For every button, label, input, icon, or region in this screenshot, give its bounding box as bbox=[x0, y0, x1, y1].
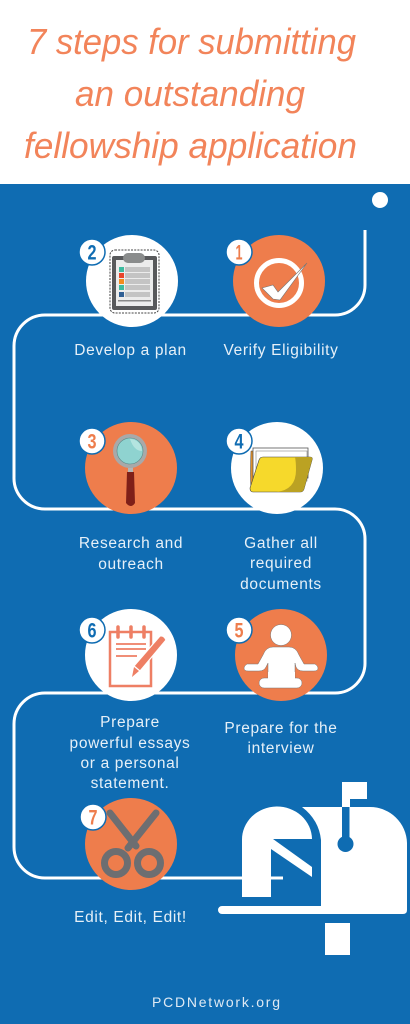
label: essays: statement. bbox=[91, 775, 169, 792]
badge 3: 3 bbox=[88, 430, 96, 454]
title: fellowship application bbox=[24, 125, 357, 166]
badge 6: 6 bbox=[88, 620, 96, 642]
label: edit: Edit, Edit, Edit! bbox=[74, 909, 187, 926]
step 1: verify eligibility bbox=[226, 235, 325, 327]
icon: notepad and pencil bbox=[110, 627, 166, 686]
step 3: research and outreach bbox=[79, 422, 177, 514]
badge 7: 7 bbox=[88, 806, 98, 830]
icon: clipboard bbox=[110, 250, 159, 313]
label: essays: or a personal bbox=[81, 755, 179, 772]
icon: folder bbox=[250, 448, 312, 492]
title: 7 steps for submitting bbox=[27, 21, 356, 62]
label: gather documents: Gather all bbox=[244, 535, 318, 552]
step 7: edit bbox=[80, 798, 177, 890]
icon: meditating figure bbox=[244, 624, 318, 688]
winding path bbox=[14, 230, 365, 878]
step 5: interview bbox=[226, 609, 327, 701]
badge 2: 2 bbox=[88, 242, 96, 264]
badge 1: 1 bbox=[236, 242, 243, 264]
icon: mailbox bbox=[218, 782, 407, 955]
label: essays: powerful essays bbox=[70, 735, 190, 752]
label: interview: Prepare for the bbox=[224, 720, 338, 737]
step 4: gather documents bbox=[226, 422, 323, 514]
label: verify eligibility: Verify Eligibility bbox=[223, 342, 339, 359]
label: gather documents: required bbox=[250, 555, 312, 572]
label: research and outreach: outreach bbox=[98, 556, 164, 573]
icon: magnifying glass bbox=[113, 434, 147, 506]
badge 4: 4 bbox=[234, 430, 244, 454]
badge 5: 5 bbox=[234, 620, 244, 642]
icon: check mark bbox=[256, 260, 307, 306]
step 2: develop a plan bbox=[79, 235, 178, 327]
label: research and outreach: Research and bbox=[79, 535, 183, 552]
label: develop a plan: Develop a plan bbox=[74, 342, 187, 359]
label: interview: interview bbox=[247, 740, 315, 757]
footer: PCDNetwork.org bbox=[152, 994, 280, 1010]
label: essays: Prepare bbox=[100, 714, 160, 731]
title bbox=[24, 21, 357, 166]
path start dot bbox=[372, 192, 388, 208]
step 6: essays bbox=[79, 609, 177, 701]
icon: scissors bbox=[104, 813, 160, 874]
title: an outstanding bbox=[75, 73, 305, 114]
label: gather documents: documents bbox=[240, 576, 322, 593]
